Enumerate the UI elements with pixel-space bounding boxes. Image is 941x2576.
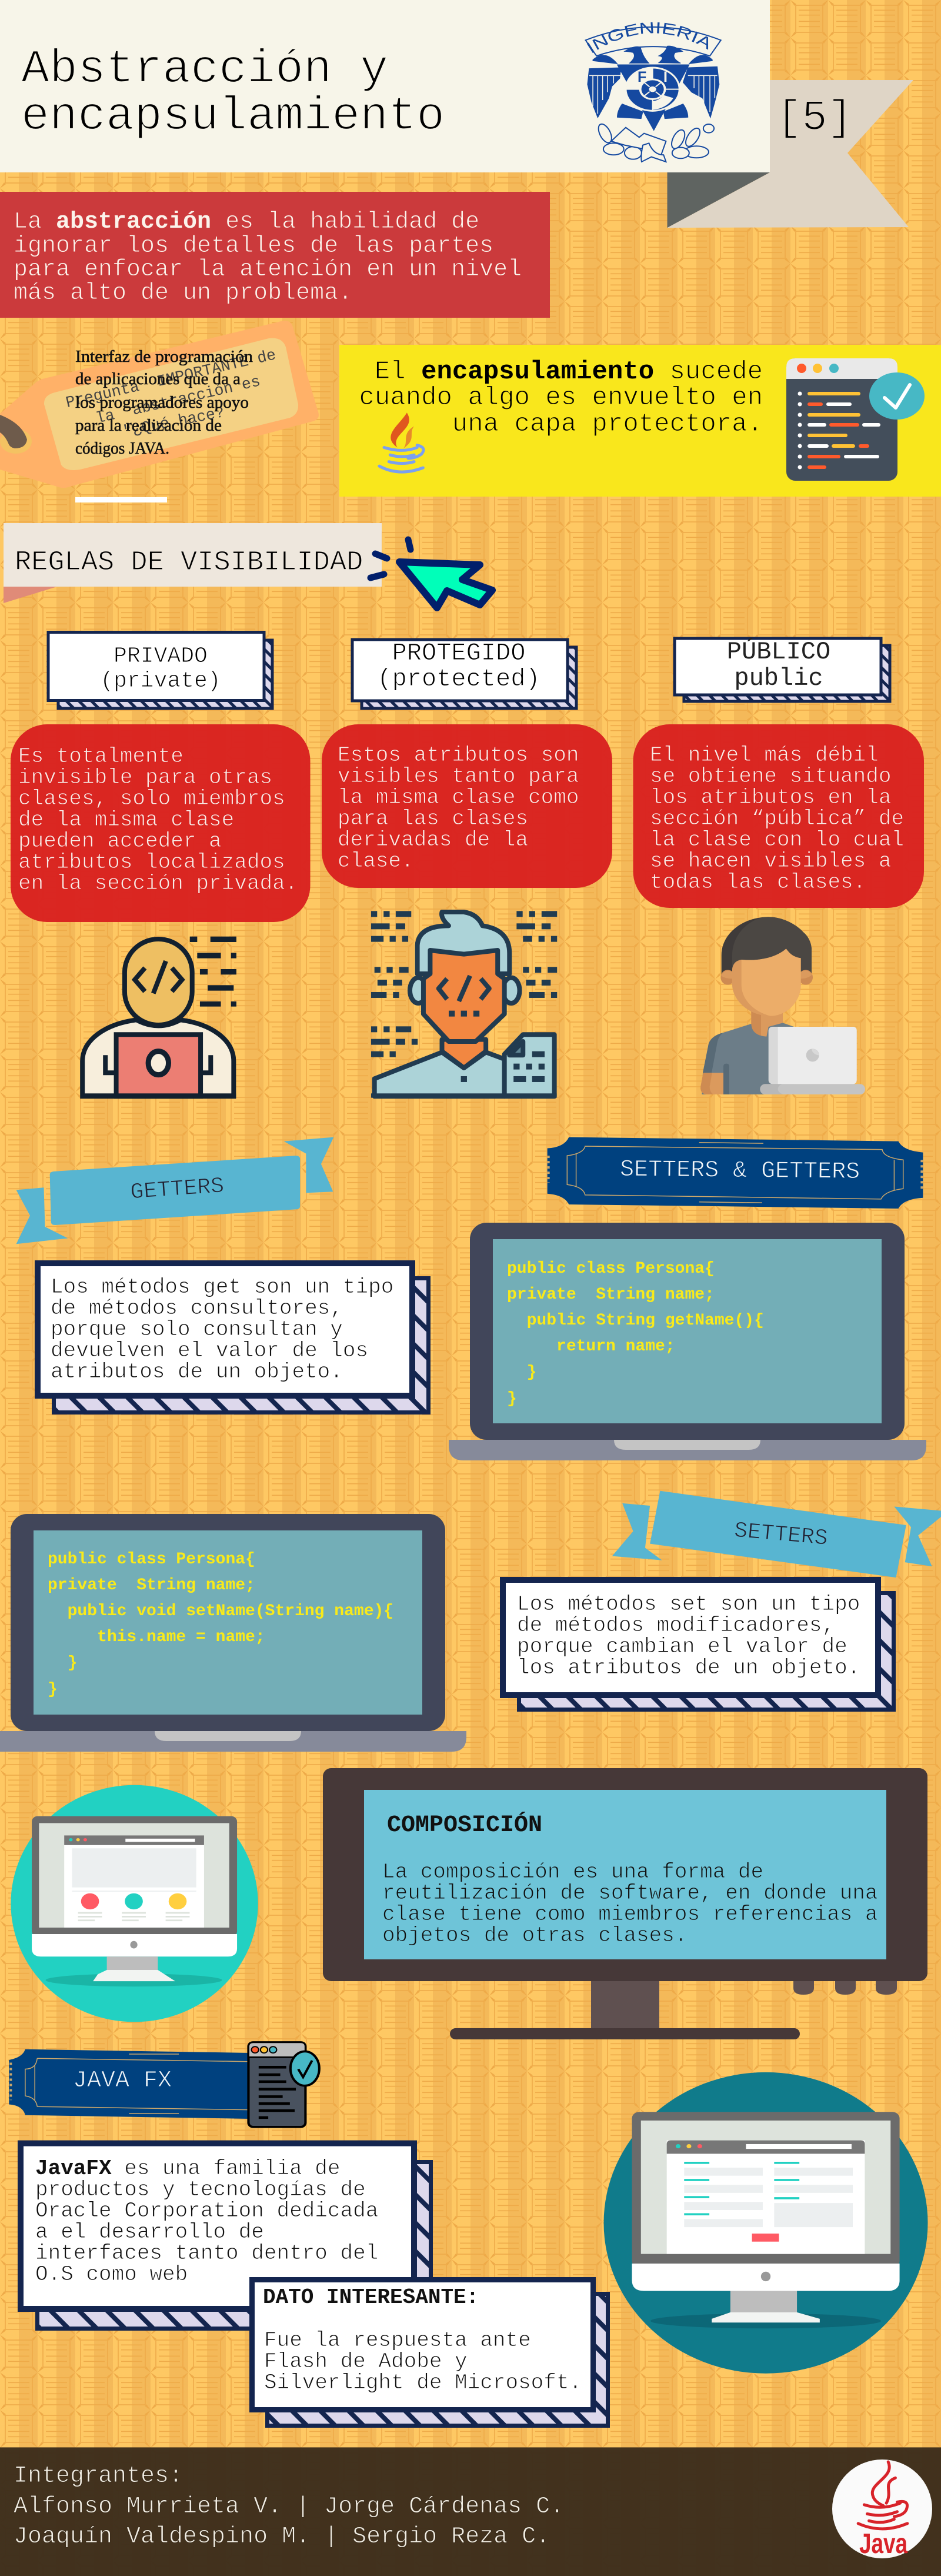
card: interesting fact: Fue la respuesta ante [264, 2328, 531, 2352]
ribbon: setters [612, 1491, 941, 1577]
box: protected [352, 639, 576, 708]
box: protected: (protected) [377, 665, 540, 693]
tag hole [0, 429, 32, 454]
rotated background text: la abstracción es [94, 372, 262, 428]
rotated background text: "¿Qué hace? [122, 404, 226, 441]
panel: public description: se obtiene situando [650, 764, 891, 788]
header banner [0, 0, 913, 228]
API description text: Interfaz de programación [75, 347, 253, 366]
panel: abstraction definition: ignorar los detalles de las partes [14, 233, 493, 259]
card: getters description [38, 1263, 428, 1412]
ribbon fold [667, 172, 770, 228]
laptop: setName code: } [48, 1654, 77, 1672]
panel: private description: atributos localizados [18, 850, 285, 874]
laptop: setName code: this.name = name; [48, 1628, 265, 1646]
monitor frame [323, 1768, 927, 1981]
laptop: setName code: } [48, 1680, 58, 1699]
white divider bar [75, 497, 167, 502]
panel: public description: sección “pública” de [650, 807, 904, 831]
tag: API note [0, 321, 319, 488]
card: javafx description: O.S como web [35, 2262, 188, 2287]
icon: engineering faculty crest [585, 22, 722, 163]
heading: visibility rules [4, 523, 382, 603]
ticket: setters and getters: SETTERS & GETTERS [620, 1157, 860, 1186]
API description text [75, 347, 253, 458]
panel: private description: pueden acceder a [18, 829, 222, 853]
box: private [48, 632, 272, 708]
panel: abstraction definition: abstracción es la habilidad de [56, 209, 479, 235]
monitor screen [364, 1790, 886, 1959]
card: javafx description: interfaces tanto dentro del [35, 2241, 378, 2265]
panel: protected description: visibles tanto para [338, 764, 579, 788]
laptop: setName code [0, 1514, 466, 1752]
laptop: getName code: public String getName(){ [507, 1312, 764, 1330]
panel: private description [11, 724, 311, 922]
java wordmark: Java [859, 2528, 907, 2560]
panel: encapsulation definition: El encapsulamiento sucede [375, 357, 763, 387]
issue number: [5] [776, 94, 853, 142]
card: javafx description: a el desarrollo de [35, 2220, 264, 2244]
box: protected: PROTEGIDO [392, 639, 525, 667]
panel: private description: invisible para otras [18, 766, 272, 790]
panel: abstraction definition: más alto de un problema. [14, 280, 352, 307]
panel: abstraction definition: La [14, 209, 56, 235]
panel: private description: de la misma clase [18, 808, 234, 832]
ribbon: getters [16, 1137, 333, 1244]
card: setters description: los atributos de un objeto. [517, 1656, 860, 1680]
laptop: setName code: public void setName(String name){ [48, 1602, 393, 1620]
icon: java logo [832, 2459, 932, 2560]
API description text: de aplicaciones que da a [75, 370, 241, 388]
panel: public description [633, 724, 924, 908]
card: setters description: Los métodos set son un tipo [517, 1592, 860, 1616]
card: setters description: de métodos modificadores, [517, 1613, 835, 1638]
card: setters description [503, 1580, 894, 1710]
laptop: getName code: private String name; [507, 1286, 715, 1304]
team members text: Joaquín Valdespino M. | Sergio Reza C. [14, 2524, 550, 2550]
footer band [0, 2447, 941, 2576]
composition text: objetos de otras clases. [382, 1923, 687, 1948]
icon: cursor [371, 540, 492, 608]
card: getters description: de métodos consultores, [51, 1296, 343, 1320]
box: public: PÚBLICO [727, 638, 830, 666]
composition text: La composición es una forma de [382, 1860, 763, 1884]
title: encapsulamiento [21, 90, 445, 144]
panel: encapsulation definition: cuando algo es envuelto en [359, 383, 763, 412]
team members text: Integrantes: [14, 2463, 183, 2490]
card: getters description: devuelven el valor de los [51, 1339, 368, 1363]
laptop: setName code: public class Persona{ [48, 1550, 255, 1569]
card: interesting fact: Silverlight de Microsoft. [264, 2371, 582, 2395]
heading: visibility rules: REGLAS DE VISIBILIDAD [15, 547, 363, 578]
laptop: setName code: private String name; [48, 1576, 255, 1595]
icon: person with laptop [700, 917, 865, 1094]
ticket: java fx: JAVA FX [73, 2068, 172, 2094]
illustration: desktop monitor on teal circle [11, 1785, 258, 2022]
card: setters description: porque cambian el valor de [517, 1635, 847, 1659]
ribbon flag [667, 80, 913, 228]
crest initials: F [638, 69, 646, 85]
icon: developer with laptop [81, 937, 236, 1098]
card: interesting fact: Flash de Adobe y [264, 2349, 468, 2374]
ribbon: getters: GETTERS [129, 1174, 225, 1206]
laptop: getName code: public class Persona{ [507, 1260, 715, 1278]
composition text: reutilización de software, en donde una [382, 1881, 878, 1905]
ticket: java fx [9, 2049, 255, 2119]
monitor base [450, 2028, 800, 2039]
card: javafx description: Oracle Corporation dedicada [35, 2199, 378, 2223]
card: javafx description: es una familia de [112, 2156, 340, 2181]
card: javafx description [21, 2144, 431, 2329]
illustration: desktop monitor on dark teal circle [604, 2072, 928, 2374]
panel: public description: todas las clases. [650, 870, 866, 894]
team members text: Alfonso Murrieta V. | Jorge Cárdenas C. [14, 2494, 564, 2520]
panel: public description: El nivel más débil [650, 743, 879, 767]
rotated background text: Pregunta IMPORTANTE de [64, 346, 278, 412]
composition text: clase tiene como miembros referencias a [382, 1902, 878, 1926]
panel: protected description [322, 724, 612, 888]
panel: abstraction definition [0, 192, 550, 318]
panel: encapsulation definition [339, 345, 941, 497]
ticket: setters and getters [548, 1137, 923, 1209]
ribbon: setters: SETTERS [733, 1518, 829, 1552]
laptop: getName code: return name; [507, 1337, 675, 1356]
panel: private description: clases, solo miembros [18, 787, 285, 811]
panel: protected description: Estos atributos son [338, 743, 579, 767]
tag inner label [44, 338, 298, 470]
card: interesting fact: DATO INTERESANTE: [263, 2285, 479, 2309]
monitor stand [591, 1981, 897, 2028]
laptop: getName code: } [507, 1390, 517, 1408]
icon: developer with building [371, 911, 557, 1098]
crest initials second: I [663, 69, 668, 85]
card: getters description: porque solo consultan y [51, 1317, 343, 1342]
icon: code window [786, 358, 925, 481]
laptop: getName code [449, 1223, 926, 1460]
panel: protected description: para las clases [338, 807, 528, 831]
card: javafx description: productos y tecnologías de [35, 2178, 366, 2202]
box: public: public [734, 664, 823, 693]
API description text: para la realización de [75, 416, 222, 435]
box: private: (private) [100, 668, 221, 694]
card: interesting fact [252, 2279, 608, 2425]
card: javafx description: JavaFX [35, 2156, 112, 2181]
laptop: getName code: } [507, 1363, 536, 1382]
card: getters description: Los métodos get son un tipo [51, 1275, 393, 1299]
panel: protected description: clase. [338, 849, 414, 873]
card: getters description: atributos de un objeto. [51, 1360, 343, 1384]
icon: java fx code window [248, 2042, 319, 2127]
rotated background text [64, 346, 278, 441]
panel: private description: Es totalmente [18, 744, 183, 768]
crest lettering: INGENIERIA [587, 22, 708, 53]
panel: public description: la clase con lo cual [650, 828, 904, 852]
panel: public description: se hacen visibles a [650, 849, 891, 873]
icon: java cup [379, 412, 423, 472]
title: Abstracción y [21, 43, 388, 96]
API description text: los programadores apoyo [75, 393, 249, 412]
panel: protected description: derivadas de la [338, 828, 528, 852]
composition heading: COMPOSICIÓN [387, 1810, 542, 1839]
panel: encapsulation definition: una capa protectora. [452, 410, 763, 439]
box: public [675, 637, 890, 701]
API description text: códigos JAVA. [75, 439, 169, 458]
panel: public description: los atributos en la [650, 786, 891, 810]
monitor: composition panel [323, 1768, 927, 2039]
panel: private description: en la sección privada. [18, 871, 298, 896]
panel: protected description: la misma clase como [338, 786, 579, 810]
tag body [0, 321, 319, 488]
tag string [0, 415, 27, 448]
panel: abstraction definition: para enfocar la atención en un nivel [14, 257, 522, 283]
header panel [0, 0, 770, 172]
box: private: PRIVADO [114, 644, 208, 669]
